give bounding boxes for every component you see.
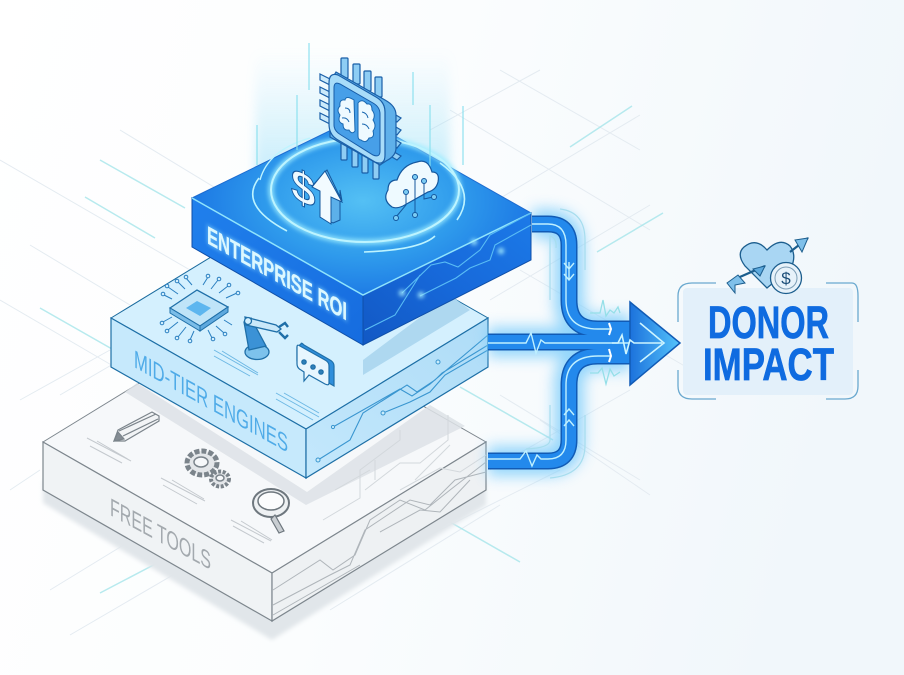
free tools top face [43,311,486,573]
pulse marks [590,300,620,316]
text: enterprise roi: ENTERPRISE ROI [207,221,347,326]
icon: gears [187,451,229,486]
text: free tools: FREE TOOLS [110,493,211,576]
note lines [214,350,319,420]
icon: chip with brain [320,58,401,179]
rings [253,138,464,252]
icon: cloud circuit [386,161,438,220]
dark outline [488,224,630,461]
vertical light streaks [257,43,463,180]
icon: heart with arrow and coin: $ [781,269,791,288]
icon: pencil [114,412,159,441]
blue pipe body [488,224,630,461]
tier: enterprise roi [192,43,531,345]
text: impact: IMPACT [703,339,834,390]
faint halo arcs [526,209,585,478]
icon: chat bubble [297,343,334,386]
icon: magnifier [253,489,289,533]
note lines [87,438,272,543]
text: mid-tier engines: MID-TIER ENGINES [134,345,288,458]
tier: mid-tier engines [111,207,488,478]
tier: free tools [43,311,486,640]
enterprise top face [192,116,531,295]
icon: dollar and arrow [291,157,342,224]
icon: heart with arrow and coin [727,238,808,294]
arrow head [612,302,680,385]
corner brackets [678,283,858,399]
connector pipes [488,209,630,478]
icon: robot arm [244,317,288,360]
mid-tier top face [111,207,488,429]
text glow: ENTERPRISE ROI [207,221,347,326]
icon: cpu [160,274,240,343]
text: donor: DONOR [708,297,829,348]
panel: donor impact [678,283,858,399]
brain [338,98,375,142]
icon: dollar and arrow: $ [291,157,316,219]
ring glow [271,138,459,242]
light tracer lines [488,224,630,466]
